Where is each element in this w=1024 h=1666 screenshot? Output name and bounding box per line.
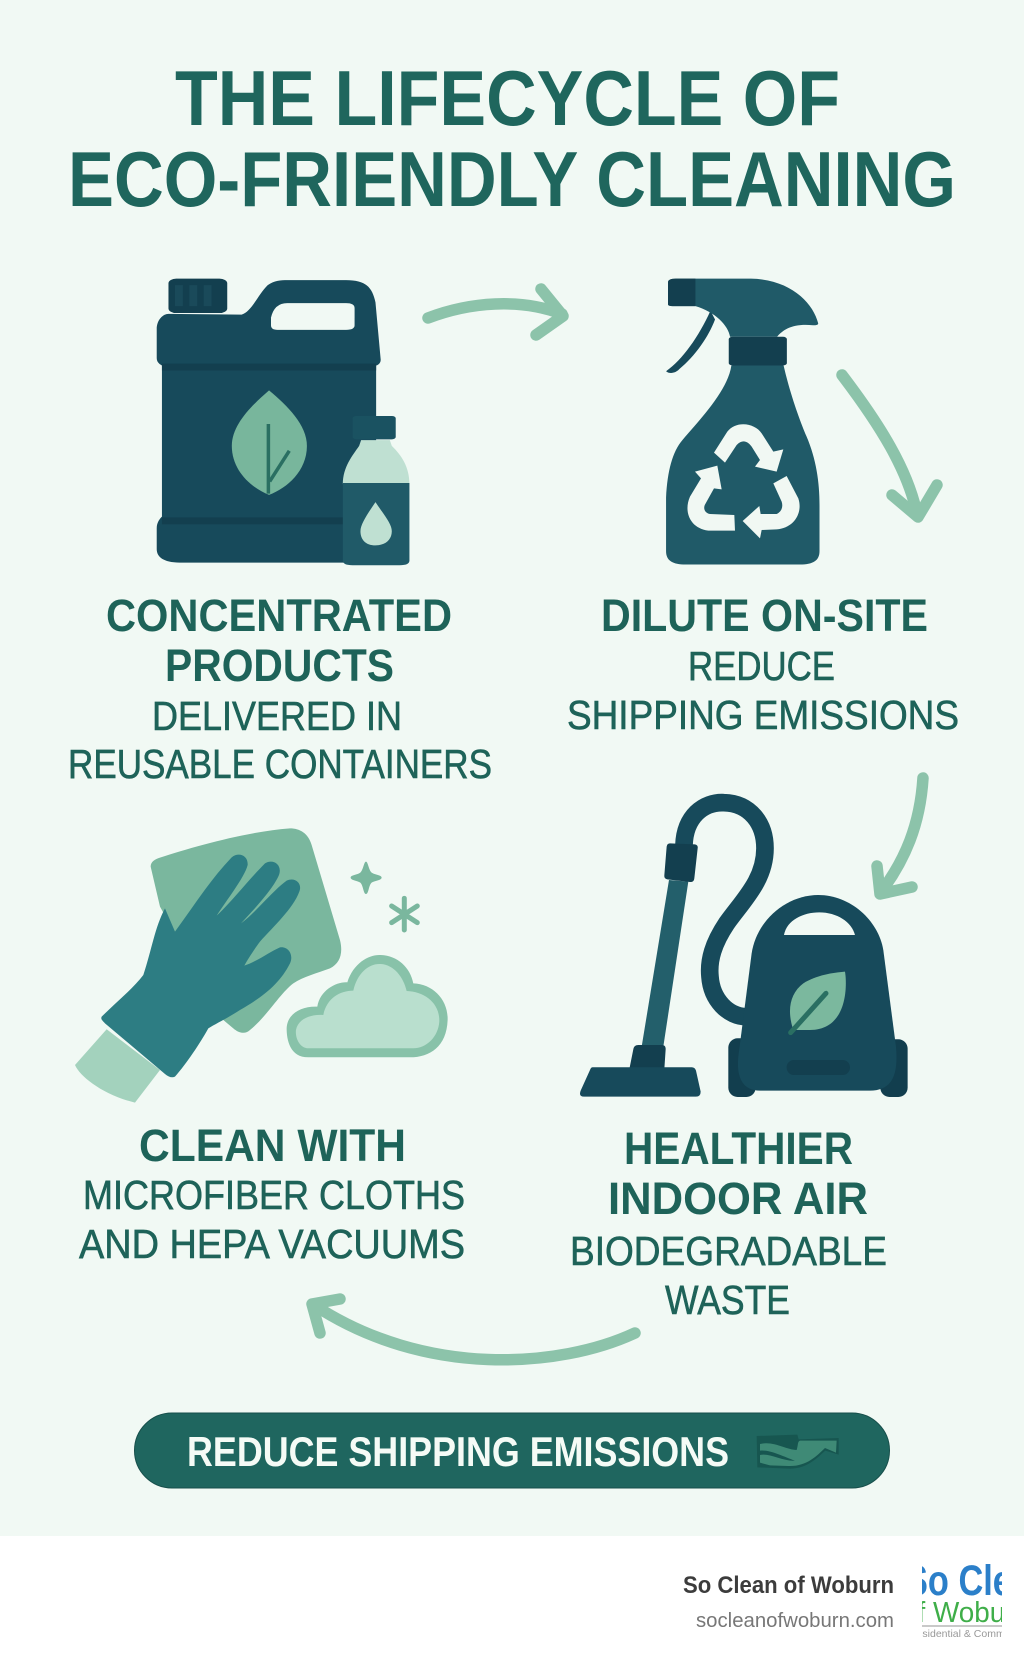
title: THE LIFECYCLE OF	[175, 54, 840, 142]
text: concentrated products: PRODUCTS	[165, 640, 394, 691]
text: healthier indoor air: BIODEGRADABLE	[570, 1228, 887, 1274]
text: dilute on-site: SHIPPING EMISSIONS	[567, 692, 959, 738]
text: concentrated products	[68, 590, 492, 787]
icon: banner emblem	[757, 1435, 839, 1469]
text: clean with microfiber: MICROFIBER CLOTHS	[83, 1172, 465, 1218]
footer: company name and website: So Clean of Woburn	[683, 1572, 894, 1599]
logo: So Clean of Woburn	[902, 1557, 1024, 1640]
text: clean with microfiber	[79, 1120, 465, 1267]
text: concentrated products: DELIVERED IN	[152, 693, 402, 739]
text: dilute on-site: DILUTE ON-SITE	[601, 590, 928, 641]
arrow: step 4 back to step 1	[312, 1299, 635, 1360]
text: dilute on-site: REDUCE	[688, 643, 835, 689]
text: clean with microfiber: AND HEPA VACUUMS	[79, 1221, 465, 1267]
text: healthier indoor air: INDOOR AIR	[608, 1173, 868, 1224]
icon: concentrate jug and small bottle	[157, 279, 409, 565]
arrow: step 2 to step 3	[842, 375, 937, 517]
icon: HEPA vacuum with leaf	[580, 803, 908, 1097]
footer: company name and website	[683, 1572, 894, 1632]
banner: reduce shipping emissions: REDUCE SHIPPING EMISSIONS	[187, 1428, 729, 1475]
icon: spray bottle with recycling symbol	[666, 279, 820, 564]
footer: company name and website: socleanofwoburn.com	[696, 1609, 894, 1632]
arrow: step 3 to step 4	[877, 778, 923, 894]
text: healthier indoor air: WASTE	[665, 1277, 790, 1323]
arrow: step 1 to step 2	[428, 289, 563, 335]
text: healthier indoor air: HEALTHIER	[624, 1123, 853, 1174]
text: dilute on-site	[567, 590, 959, 738]
text: concentrated products: CONCENTRATED	[106, 590, 452, 641]
title	[68, 54, 956, 223]
icon: gloved hand with microfiber cloth and cloud	[75, 828, 448, 1103]
text: concentrated products: REUSABLE CONTAINERS	[68, 741, 492, 787]
text: healthier indoor air	[570, 1123, 887, 1323]
text: clean with microfiber: CLEAN WITH	[139, 1120, 406, 1171]
banner: reduce shipping emissions	[134, 1413, 890, 1488]
